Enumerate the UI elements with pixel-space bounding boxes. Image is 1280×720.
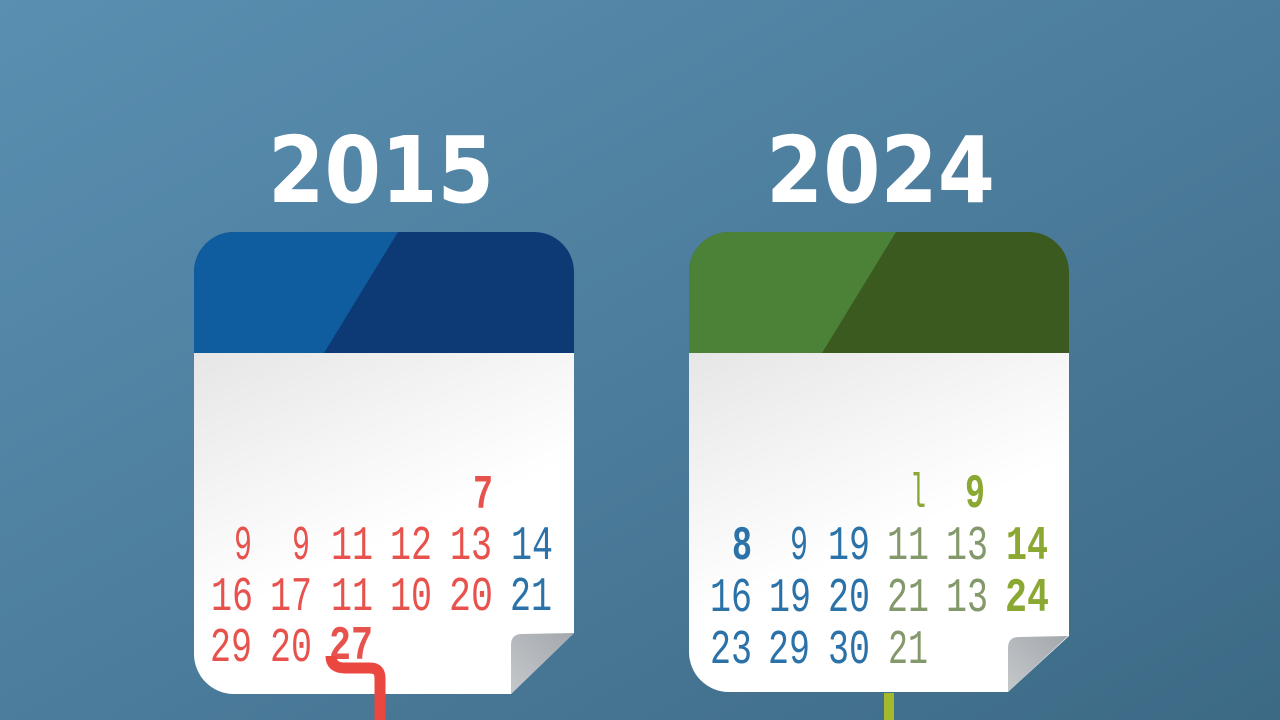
date numbers: 2015 <box>210 469 553 676</box>
date numbers: 2015: 9 <box>292 520 310 574</box>
date numbers: 2015: 16 <box>211 571 253 625</box>
date numbers: 2024: 29 <box>768 624 810 678</box>
date numbers: 2015: 21 <box>510 571 552 625</box>
date numbers: 2015: 12 <box>390 520 432 574</box>
date numbers: 2024: 21 <box>888 624 928 678</box>
date numbers: 2024: l <box>910 468 926 522</box>
date numbers: 2024: 11 <box>887 520 929 574</box>
date numbers: 2024: 9 <box>790 520 808 574</box>
date numbers: 2015: 11 <box>331 571 373 625</box>
connector: green <box>884 693 894 720</box>
date numbers: 2024: 23 <box>710 624 752 678</box>
date numbers: 2024: 14 <box>1006 520 1048 574</box>
date numbers: 2015: 14 <box>511 520 553 574</box>
date numbers: 2015: 7 <box>473 469 493 523</box>
page fold <box>1008 636 1068 692</box>
date numbers: 2015: 27 <box>329 620 373 674</box>
date numbers: 2015: 11 <box>331 520 373 574</box>
date numbers: 2015: 20 <box>449 571 493 625</box>
heading: 2015: 2015 <box>268 117 494 224</box>
date numbers: 2024: 13 <box>946 572 988 626</box>
connector: red <box>331 656 380 720</box>
date numbers: 2024: 8 <box>732 520 752 574</box>
page fold <box>511 633 574 694</box>
date numbers: 2015: 9 <box>234 520 252 574</box>
date numbers: 2024: 20 <box>828 572 870 626</box>
calendar page <box>194 353 574 694</box>
panel: 2015 calendar <box>194 117 574 720</box>
date numbers: 2024 <box>710 468 1049 678</box>
date numbers: 2015: 20 <box>270 622 312 676</box>
date numbers: 2024: 13 <box>946 520 988 574</box>
date numbers: 2024: 19 <box>828 520 870 574</box>
date numbers: 2024: 21 <box>887 572 929 626</box>
date numbers: 2024: 24 <box>1005 572 1049 626</box>
date numbers: 2024: 9 <box>965 468 985 522</box>
date numbers: 2015: 29 <box>210 622 252 676</box>
calendar header: blue <box>194 232 574 353</box>
date numbers: 2015: 17 <box>270 571 312 625</box>
calendar page <box>689 353 1069 692</box>
panel: 2024 calendar <box>689 117 1069 720</box>
heading: 2024: 2024 <box>766 117 995 224</box>
date numbers: 2024: 16 <box>710 572 752 626</box>
date numbers: 2024: 30 <box>828 624 870 678</box>
date numbers: 2015: 13 <box>450 520 492 574</box>
date numbers: 2015: 10 <box>390 571 432 625</box>
date numbers: 2024: 19 <box>769 572 811 626</box>
calendar header: green <box>689 232 1069 353</box>
